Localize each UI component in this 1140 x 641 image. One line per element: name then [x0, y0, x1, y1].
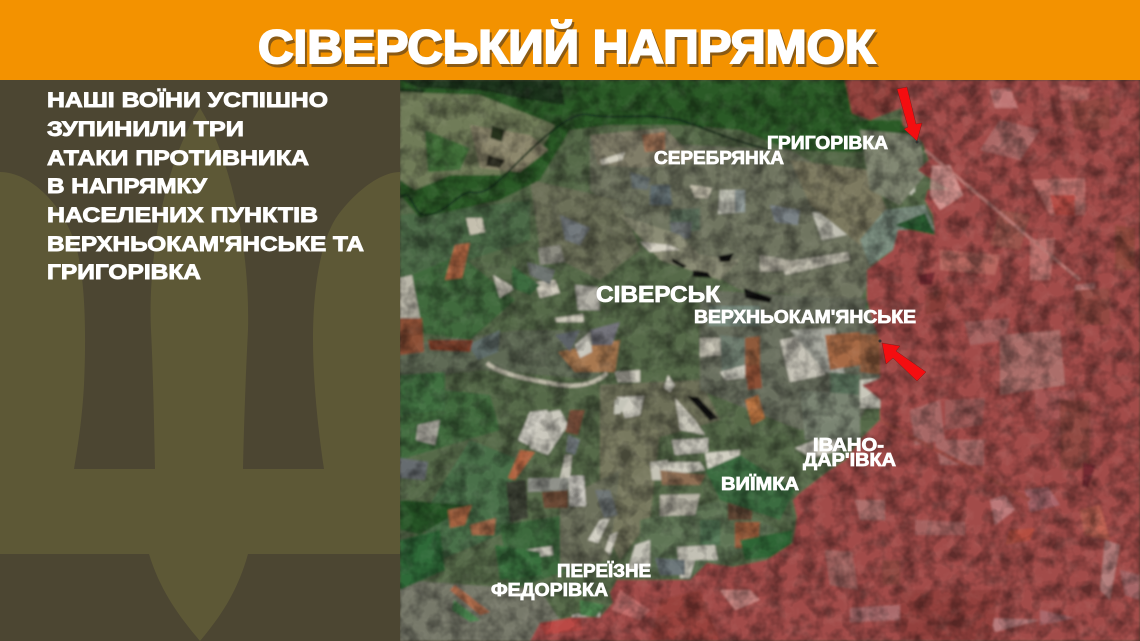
settlement ridge	[487, 363, 607, 386]
icon: trident emblem	[0, 108, 400, 641]
text block: main message: ГРИГОРІВКА	[47, 260, 201, 284]
occupied territory	[530, 80, 1140, 641]
title: СІВЕРСЬКИЙ НАПРЯМОК	[258, 20, 875, 73]
panel: left text panel with trident	[0, 80, 400, 641]
red zone texture	[540, 80, 1140, 640]
text block: main message: ЗУПИНИЛИ ТРИ	[47, 117, 244, 141]
label: Serebrianka: СЕРЕБРЯНКА	[654, 148, 784, 168]
map labels	[491, 133, 916, 600]
arrow: attack towards Verkhnokamianske	[878, 340, 926, 381]
text block: main message: АТАКИ ПРОТИВНИКА	[47, 146, 309, 170]
text block: main message: ВЕРХНЬОКАМ'ЯНСЬКЕ ТА	[47, 232, 364, 256]
fields south	[400, 372, 446, 390]
header bar	[0, 0, 1140, 80]
title: СІВЕРСЬКИЙ НАПРЯМОК	[260, 23, 877, 76]
map: satellite view of the Siversk direction	[400, 80, 1140, 641]
water bodies	[672, 258, 687, 268]
text block: main message	[47, 88, 364, 284]
label: Ivano-Darivka: ІВАНО-	[813, 435, 884, 455]
text block: main message: НАСЕЛЕНИХ ПУНКТІВ	[47, 203, 318, 227]
map texture	[400, 80, 1140, 641]
label: Pereizne: ПЕРЕЇЗНЕ	[557, 561, 651, 581]
fields west	[413, 261, 514, 340]
label: Verkhnokamianske: ВЕРХНЬОКАМ'ЯНСЬКЕ	[694, 307, 916, 327]
fields centre	[631, 174, 649, 190]
label: Siversk: СІВЕРСЬК	[596, 281, 721, 307]
east edge of grey zone	[860, 205, 935, 265]
arrow: attack towards Hryhorivka	[897, 87, 922, 144]
text block: main message: НАШІ ВОЇНИ УСПІШНО	[47, 88, 328, 112]
label: Hryhorivka: ГРИГОРІВКА	[767, 133, 888, 153]
label: Fedorivka: ФЕДОРІВКА	[491, 580, 608, 600]
map highlights	[400, 80, 1140, 641]
mottled ground patches	[590, 140, 880, 300]
forest and northern area	[400, 80, 925, 218]
label: Ivano-Darivka second line: ДАР'ІВКА	[803, 450, 896, 470]
text block: main message: В НАПРЯМКУ	[47, 174, 208, 198]
label: Vyimka: ВИЇМКА	[721, 474, 799, 494]
